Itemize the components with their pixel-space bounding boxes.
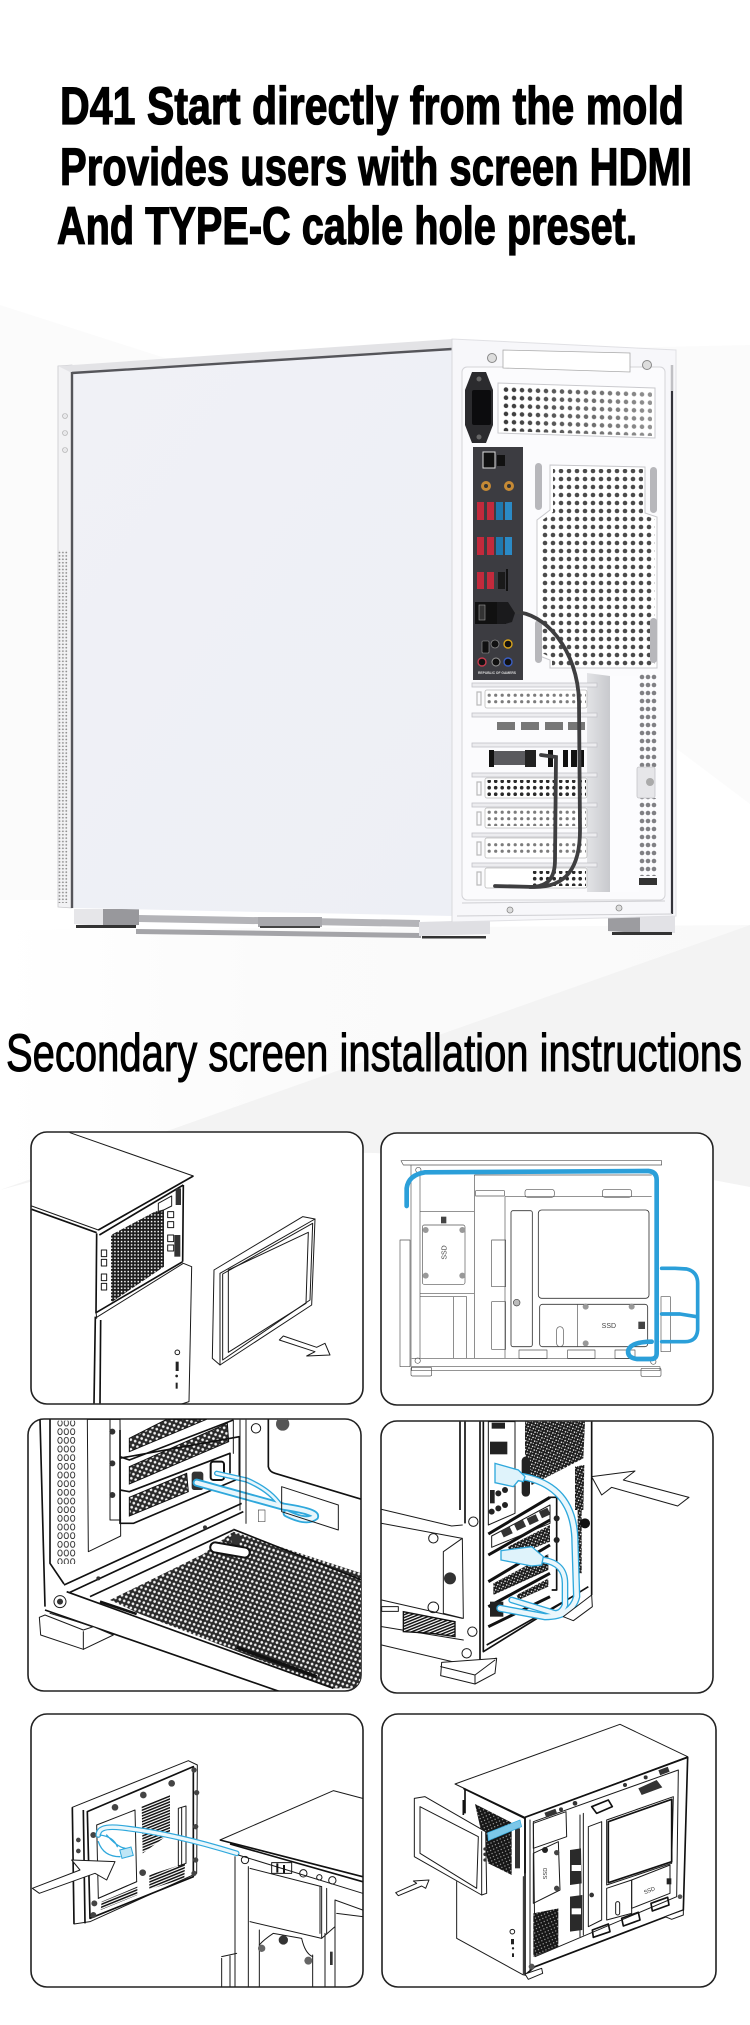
panel 4: rear connection of HDMI and Type-C cables bbox=[381, 1421, 713, 1693]
panel 3: cables through PCI slots, base mesh bbox=[28, 1417, 362, 1692]
panel 2: cable routing side view bbox=[381, 1133, 713, 1405]
GPU display ports and fan slot bbox=[489, 722, 585, 767]
rear face frame bbox=[475, 1422, 592, 1667]
interior of case: SSD bbox=[543, 1868, 549, 1879]
front lower panel bbox=[94, 1263, 192, 1404]
PCI slots bbox=[488, 1497, 560, 1627]
interior of case: SSD bbox=[643, 1886, 656, 1896]
feet and base rail bbox=[74, 909, 675, 938]
product photo: white PC case rear view bbox=[58, 339, 676, 938]
main vent bbox=[535, 463, 657, 668]
side panel bbox=[73, 349, 452, 916]
HDMI plug bbox=[497, 602, 515, 624]
I/O shield with ports bbox=[473, 447, 523, 680]
left vent column bbox=[57, 1421, 76, 1564]
right wall bbox=[268, 1419, 362, 1499]
foot bbox=[39, 1615, 113, 1649]
blue cables and plugs bbox=[500, 1477, 577, 1617]
silver PCI bracket bbox=[587, 673, 610, 892]
panel 6: final assembled view bbox=[382, 1714, 716, 1987]
blue looped cables bbox=[197, 1473, 315, 1519]
top vent bbox=[498, 383, 655, 438]
blue cable bbox=[488, 1820, 522, 1841]
rear panel with vent bbox=[463, 1788, 525, 1875]
I/O panel bbox=[488, 1422, 515, 1525]
SSD bracket bbox=[422, 1217, 465, 1284]
bottom frame screws bbox=[507, 905, 622, 913]
title: three-line heading bbox=[57, 77, 692, 256]
arrow bbox=[396, 1880, 429, 1896]
lower front bbox=[457, 1877, 523, 1975]
front strip with mesh bbox=[58, 365, 72, 908]
case top face bbox=[32, 1133, 193, 1230]
top plate bbox=[455, 1724, 688, 1817]
panel 5: connecting cable to screen back bbox=[31, 1714, 363, 1987]
interior of case bbox=[525, 1757, 688, 1975]
PCI slot covers bbox=[472, 683, 597, 888]
arrow bbox=[32, 1860, 115, 1893]
back plate bbox=[87, 1419, 121, 1552]
monitor bbox=[414, 1797, 487, 1895]
main board area bbox=[511, 1210, 649, 1347]
black HDMI and Type-C cables bbox=[495, 612, 580, 887]
I/O shield with ports: REPUBLIC OF GAMERS bbox=[478, 671, 517, 675]
rear panel and ports bbox=[96, 1185, 183, 1313]
feet bbox=[525, 1968, 543, 1979]
main board area: SSD bbox=[602, 1323, 616, 1330]
rear mesh vent bbox=[111, 1209, 164, 1303]
base mesh bbox=[110, 1532, 362, 1688]
blue cable bbox=[98, 1827, 237, 1857]
side view box bbox=[382, 1422, 478, 1667]
arrow bbox=[592, 1471, 689, 1506]
panel 1: monitor next to case rear bbox=[31, 1132, 363, 1404]
base frame bbox=[45, 1503, 362, 1692]
right vent column bbox=[610, 673, 657, 892]
case outline bbox=[400, 1161, 670, 1376]
monitor bbox=[212, 1217, 315, 1365]
PCI vented slots bbox=[109, 1419, 239, 1523]
foot bbox=[441, 1658, 497, 1684]
case corner bbox=[220, 1791, 363, 1987]
SSD bracket: SSD bbox=[441, 1245, 448, 1260]
monitor back bbox=[72, 1761, 199, 1924]
frame lines bbox=[40, 1419, 64, 1607]
top edge of case bbox=[58, 339, 452, 373]
rear panel bbox=[452, 339, 676, 922]
top handle and screws bbox=[488, 350, 652, 372]
power socket bbox=[465, 372, 493, 443]
top vent bbox=[525, 1422, 585, 1485]
arrow bbox=[279, 1336, 330, 1356]
blue cable route bbox=[407, 1171, 698, 1359]
